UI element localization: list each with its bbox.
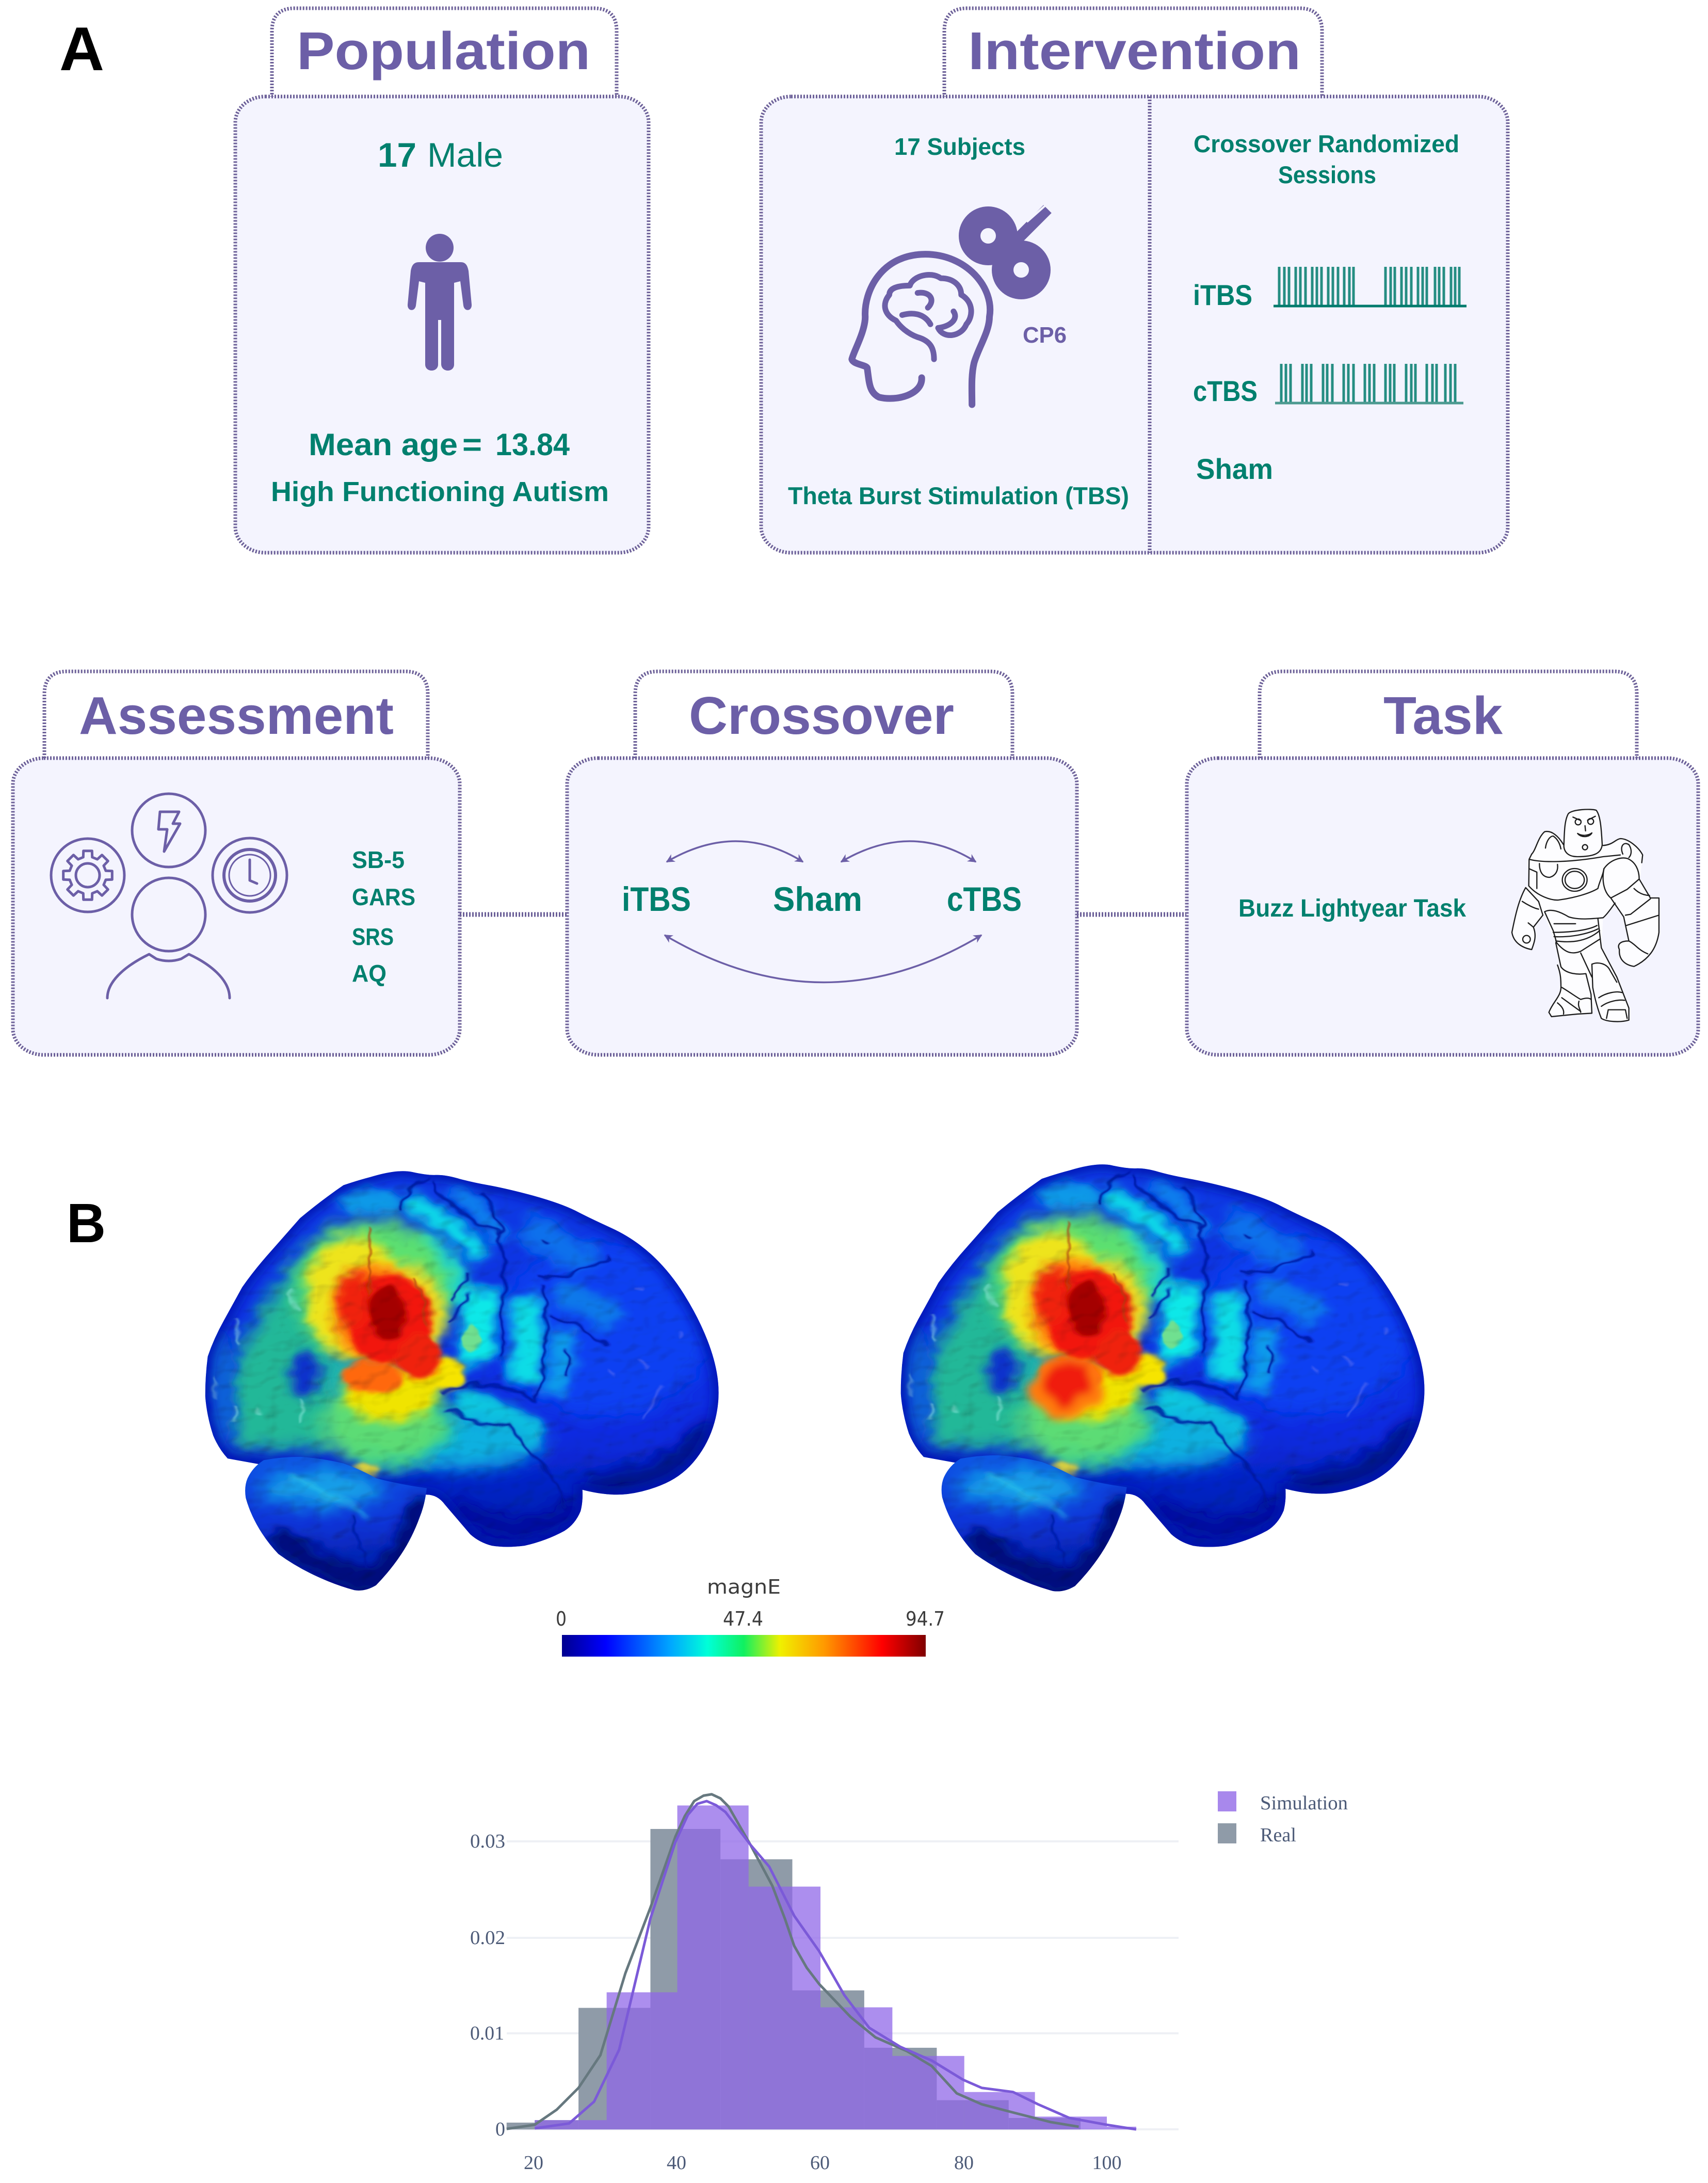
- text: crossover randomized sessions: Sessions: [1278, 161, 1376, 188]
- icon: person outline: [107, 878, 230, 998]
- brain map: left: [181, 1146, 760, 1607]
- colorbar tick labels: 94.7: [906, 1608, 945, 1630]
- y axis labels: 0.01: [470, 2023, 504, 2044]
- text: mean age: [309, 427, 570, 462]
- intervention heading tab: [944, 8, 1322, 98]
- panel: intervention: [761, 8, 1508, 553]
- crossover heading tab: [635, 671, 1012, 758]
- connector: crossover to task: [1077, 912, 1186, 917]
- legend: [1218, 1791, 1348, 1846]
- gridlines: [507, 1841, 1179, 2129]
- icon: person: [408, 234, 472, 371]
- connector: assessment to crossover: [460, 912, 567, 917]
- legend: simulation: [1218, 1791, 1348, 1814]
- population box: [235, 97, 649, 553]
- x axis labels: 100: [1092, 2152, 1122, 2174]
- panel: crossover: [567, 671, 1077, 1055]
- assessment list: SRS: [352, 923, 394, 950]
- x axis labels: 60: [810, 2152, 830, 2174]
- text: 17 subjects: 17 Subjects: [894, 133, 1025, 160]
- colorbar ramp: [562, 1635, 926, 1657]
- heading: crossover: Crossover: [689, 686, 954, 745]
- intervention box: [761, 97, 1508, 553]
- text: crossover randomized sessions: Crossover Randomized: [1194, 130, 1459, 157]
- arrow: iTBS to sham: [667, 841, 803, 862]
- icon: head with brain: [852, 254, 990, 405]
- text: 17 male: 17: [378, 136, 416, 174]
- heading: assessment: Assessment: [79, 686, 394, 745]
- y axis labels: 0.02: [470, 1927, 505, 1949]
- population heading tab: [272, 8, 617, 98]
- colorbar tick labels: [556, 1608, 945, 1630]
- colorbar legend: [556, 1576, 945, 1657]
- panel: population: [235, 8, 649, 553]
- bars and curves: [507, 1794, 1136, 2129]
- text: buzz lightyear task: Buzz Lightyear Task: [1238, 895, 1466, 922]
- assessment list: [352, 846, 415, 987]
- label: cTBS: cTBS: [947, 880, 1022, 918]
- x axis labels: [524, 2152, 1122, 2174]
- y axis labels: 0: [495, 2118, 505, 2140]
- panel: task: [1187, 671, 1698, 1055]
- label: iTBS: iTBS: [622, 880, 691, 918]
- x axis labels: 40: [667, 2152, 686, 2174]
- text: mean age: 13.84: [495, 427, 570, 462]
- extended hot spot: [1030, 1358, 1101, 1418]
- label: sham: Sham: [1196, 453, 1273, 485]
- colorbar tick labels: 0: [556, 1608, 567, 1630]
- assessment list: AQ: [352, 960, 386, 987]
- curve: real: [507, 1794, 1078, 2129]
- icon: clock: [213, 838, 287, 912]
- heading: population: Population: [297, 21, 590, 81]
- icon: lightning bolt: [132, 794, 205, 867]
- label: cTBS: cTBS: [1193, 375, 1258, 407]
- divider: [1148, 97, 1152, 553]
- y axis labels: 0.03: [470, 1831, 505, 1852]
- text: mean age: =: [462, 427, 482, 462]
- arrow: iTBS to cTBS: [665, 935, 981, 983]
- task heading tab: [1260, 671, 1637, 758]
- legend: real: [1218, 1823, 1296, 1846]
- task box: [1187, 758, 1698, 1055]
- assessment list: SB-5: [352, 846, 405, 873]
- icon: gear: [51, 839, 124, 912]
- text: 17 male: Male: [427, 136, 503, 174]
- panel: assessment: [13, 671, 460, 1055]
- illustration: buzz lightyear line drawing: [1512, 809, 1659, 1022]
- bars: real: [507, 1829, 1081, 2129]
- colorbar tick labels: 47.4: [723, 1608, 763, 1630]
- text: crossover randomized sessions: [1194, 130, 1459, 188]
- text: high functioning autism: High Functioning Autism: [271, 476, 609, 507]
- label: panel A: A: [59, 14, 104, 84]
- label: iTBS: iTBS: [1193, 279, 1252, 311]
- chart: histogram with density curves: [470, 1791, 1348, 2174]
- text: mean age: Mean age: [309, 427, 458, 462]
- label: panel B: B: [67, 1192, 106, 1254]
- label: CP6: CP6: [1023, 323, 1067, 348]
- x axis labels: 20: [524, 2152, 543, 2174]
- assessment list: GARS: [352, 884, 415, 910]
- pulse train: cTBS: [1275, 364, 1463, 403]
- pulse train: iTBS: [1274, 267, 1467, 306]
- y axis labels: [470, 1831, 505, 2140]
- heading: task: Task: [1383, 686, 1503, 745]
- icon: person with gear, bolt and clock: [51, 794, 287, 998]
- bars: simulation: [535, 1805, 1136, 2129]
- text: 17 male: [378, 136, 503, 174]
- legend: real: Real: [1260, 1824, 1296, 1846]
- arrow: sham to cTBS: [841, 841, 976, 862]
- brain copy: [876, 1138, 1467, 1608]
- assessment heading tab: [44, 671, 428, 758]
- brain map: right: [876, 1138, 1467, 1608]
- crossover box: [567, 758, 1077, 1055]
- assessment box: [13, 758, 460, 1055]
- label: sham: Sham: [773, 880, 862, 918]
- text: theta burst stimulation: Theta Burst Stimulation (TBS): [788, 482, 1129, 509]
- heading: intervention: Intervention: [968, 21, 1301, 81]
- colorbar title: magnE: [707, 1576, 781, 1598]
- curve: simulation: [535, 1801, 1136, 2129]
- icon: stimulation coil: [959, 205, 1051, 299]
- legend: simulation: Simulation: [1260, 1792, 1348, 1814]
- x axis labels: 80: [954, 2152, 974, 2174]
